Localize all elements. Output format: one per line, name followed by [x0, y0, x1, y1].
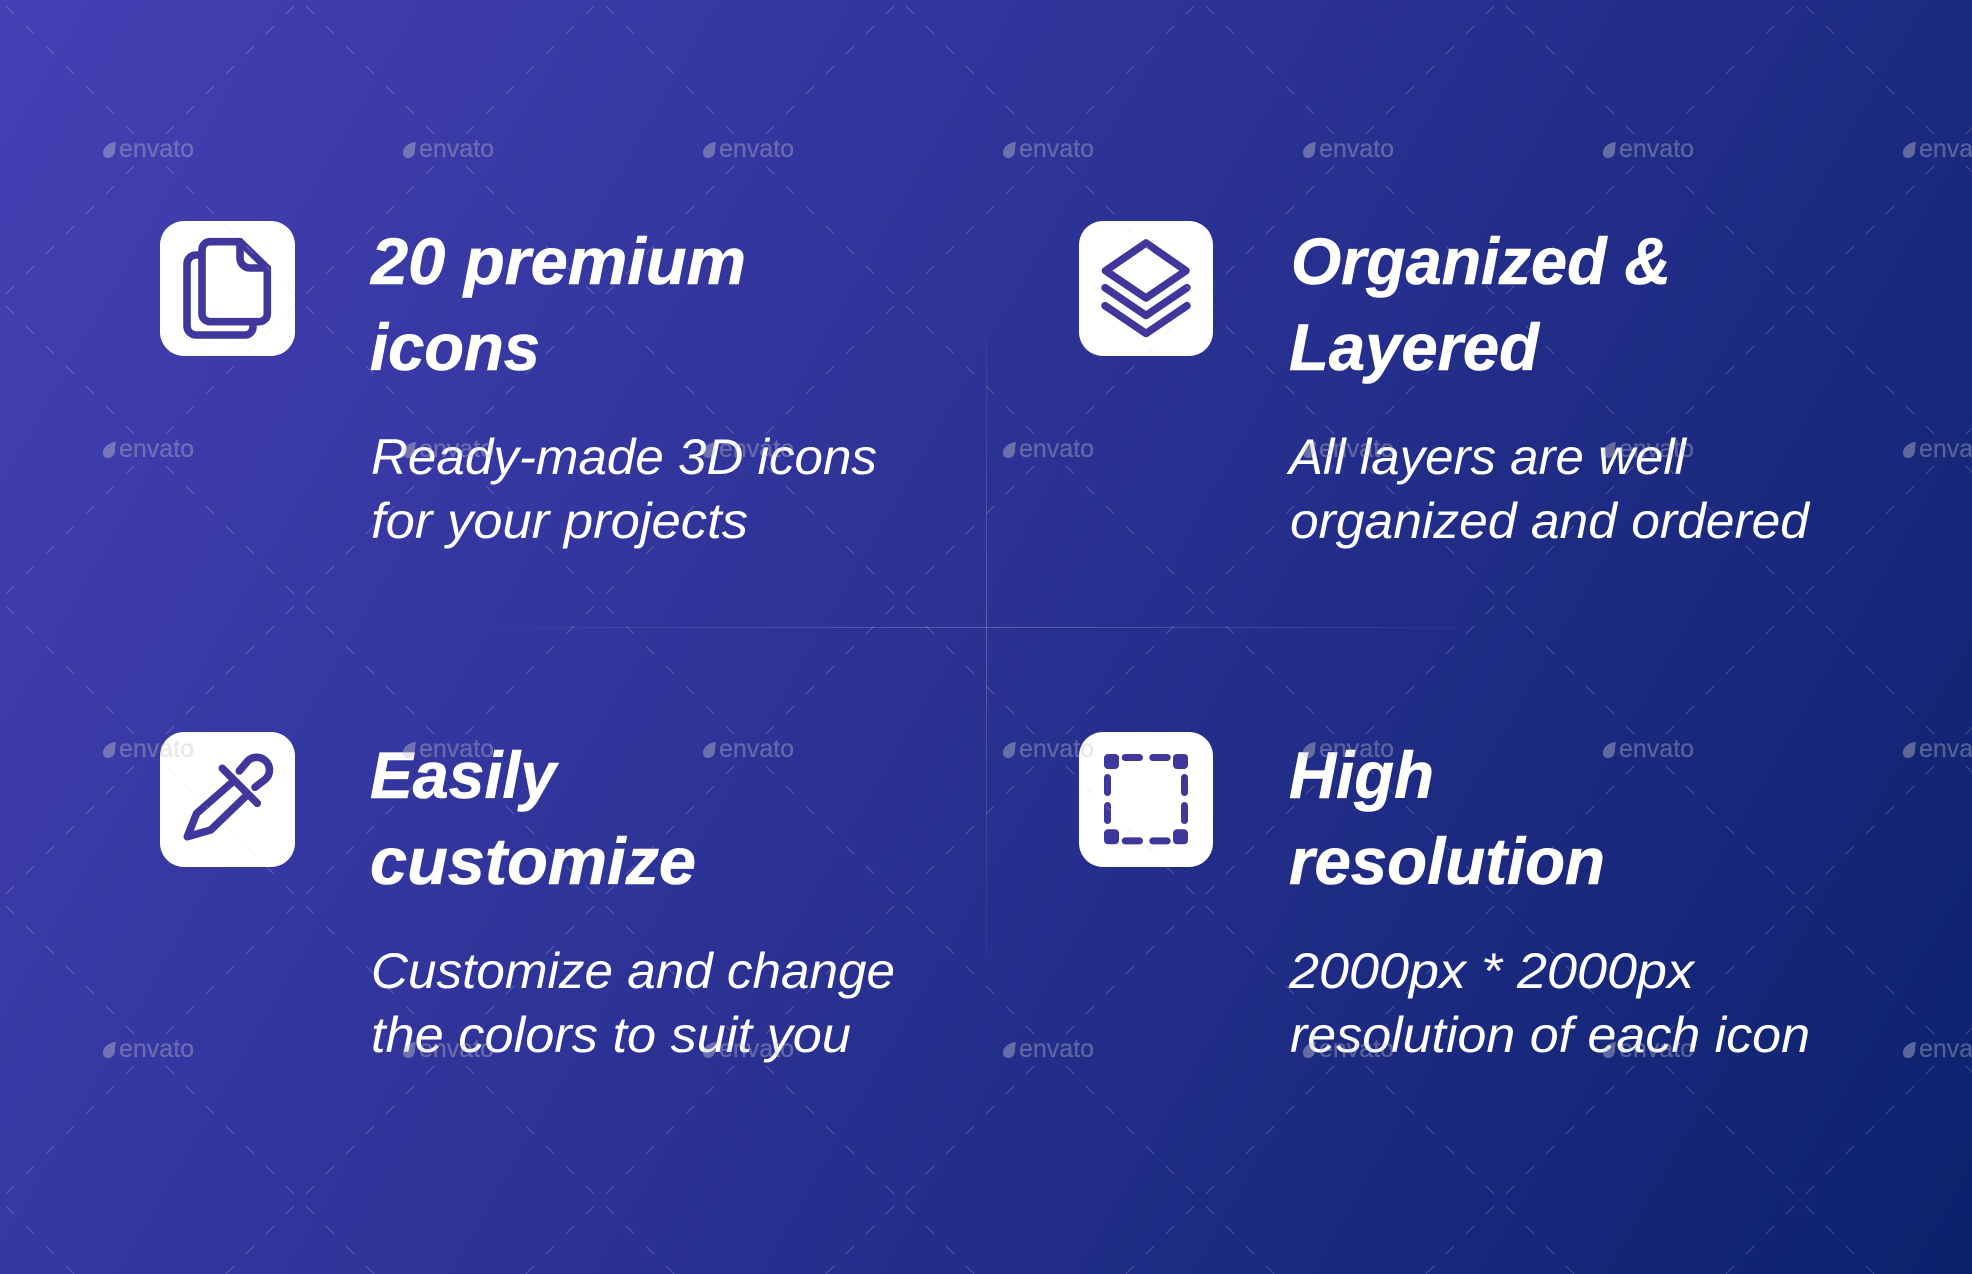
watermark overlay: envato — [119, 735, 194, 763]
panel: 20 premium icons — [160, 221, 877, 549]
watermark overlay: envato — [419, 435, 494, 463]
watermark overlay: envato — [719, 1035, 794, 1063]
watermark overlay: envato — [419, 1035, 494, 1063]
watermark overlay: envato — [119, 435, 194, 463]
description — [1288, 943, 1810, 1063]
description: organized and ordered — [1290, 493, 1811, 549]
panel: easily customize — [160, 732, 895, 1063]
watermark overlay: envato — [119, 135, 194, 163]
icon: layers — [1079, 221, 1213, 356]
heading: icons — [370, 310, 540, 384]
description: Customize and change — [371, 943, 895, 999]
watermark overlay: envato — [1619, 135, 1694, 163]
description: for your projects — [371, 493, 748, 549]
watermark overlay: envato — [719, 735, 794, 763]
icon: eyedropper — [160, 732, 295, 867]
heading — [1289, 738, 1605, 898]
description: Ready-made 3D icons — [371, 429, 877, 485]
watermark overlay: envato — [1319, 1035, 1394, 1063]
description — [371, 943, 895, 1063]
panel: organized and layered — [1079, 221, 1811, 549]
description: the colors to suit you — [371, 1007, 851, 1063]
heading: High — [1289, 738, 1434, 812]
heading: Easily — [370, 738, 559, 812]
icon: dashed selection square — [1079, 732, 1213, 867]
watermark overlay: envato — [719, 435, 794, 463]
watermark overlay: envato — [1319, 435, 1394, 463]
heading: customize — [370, 824, 696, 898]
watermark overlay: envato — [1019, 1035, 1094, 1063]
watermark overlay: envato — [719, 135, 794, 163]
watermark overlay: envato — [419, 135, 494, 163]
watermark overlay: envato — [1319, 735, 1394, 763]
watermark overlay: envato — [1019, 135, 1094, 163]
watermark overlay: envato — [1619, 1035, 1694, 1063]
description: 2000px * 2000px — [1288, 943, 1696, 999]
description: resolution of each icon — [1290, 1007, 1810, 1063]
panel: high resolution — [1079, 732, 1810, 1063]
heading: Organized & — [1291, 224, 1671, 298]
heading: Layered — [1289, 310, 1541, 384]
watermark overlay: envato — [1019, 735, 1094, 763]
heading — [370, 738, 696, 898]
icon: documents — [160, 221, 295, 356]
description: All layers are well — [1286, 429, 1688, 485]
watermark overlay: envato — [419, 735, 494, 763]
watermark overlay: envato — [119, 1035, 194, 1063]
watermark overlay: envato — [1019, 435, 1094, 463]
heading — [1289, 224, 1671, 384]
watermark overlay: envato — [1319, 135, 1394, 163]
watermark overlay: envato — [1619, 735, 1694, 763]
description — [371, 429, 877, 549]
heading: resolution — [1289, 824, 1605, 898]
watermark overlay: envato — [1619, 435, 1694, 463]
divider lines — [450, 280, 1534, 1010]
description — [1286, 429, 1811, 549]
heading: 20 premium — [369, 224, 746, 298]
heading — [369, 224, 746, 384]
